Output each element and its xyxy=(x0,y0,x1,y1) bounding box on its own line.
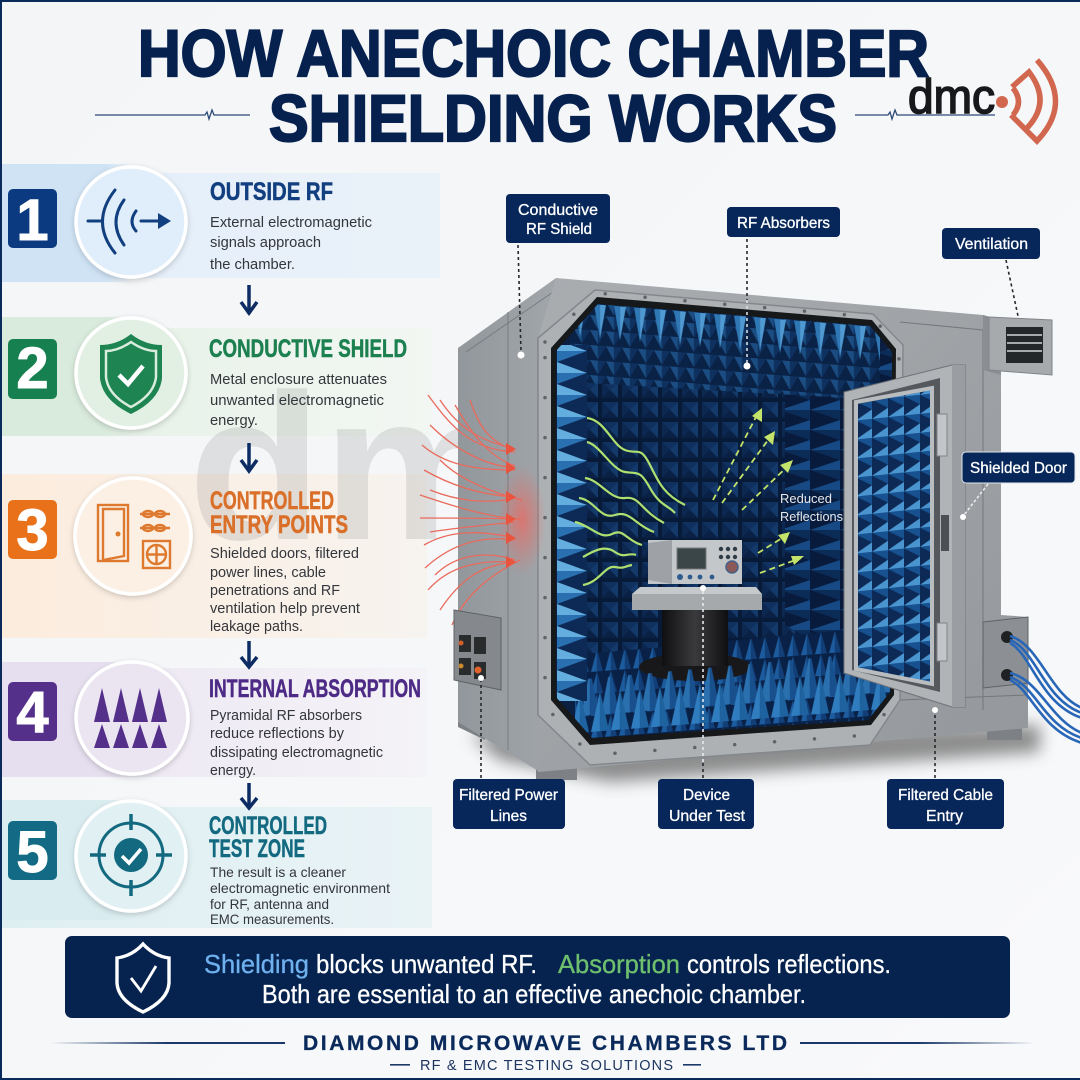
chamber interior with absorbers xyxy=(550,300,900,740)
reduced reflections label: Reduced xyxy=(780,492,832,506)
description: dissipating electromagnetic xyxy=(210,745,383,761)
summary banner xyxy=(65,936,1010,1018)
step 5: controlled test zone xyxy=(8,801,390,927)
step 3: controlled entry points xyxy=(8,478,360,635)
footer company name: DIAMOND MICROWAVE CHAMBERS LTD xyxy=(303,1032,787,1055)
front wall seams xyxy=(900,322,1028,710)
arrow 4 to 5 xyxy=(241,783,257,808)
side wall xyxy=(458,278,600,772)
frame xyxy=(538,290,903,765)
callout: filtered cable entry xyxy=(887,707,1004,829)
banner line 1: Shielding xyxy=(204,949,309,979)
icon: banner shield xyxy=(117,944,169,1012)
arrow 2 to 3 xyxy=(241,443,257,471)
description: reduce reflections by xyxy=(210,726,345,742)
number badge 1 xyxy=(8,188,57,253)
open shielded door xyxy=(844,365,965,707)
back wall pyramids xyxy=(585,375,795,660)
description: leakage paths. xyxy=(210,619,303,635)
number badge 4: 4 xyxy=(16,680,49,745)
right wall cones xyxy=(785,394,795,630)
description: power lines, cable xyxy=(210,565,326,581)
logo: dmc: dmc xyxy=(908,71,995,124)
callout: RF absorbers xyxy=(727,207,840,370)
turntable top xyxy=(632,587,762,610)
number badge 2: 2 xyxy=(16,336,49,401)
description: EMC measurements. xyxy=(210,911,334,927)
callout: filtered power lines: Filtered Power xyxy=(459,787,559,804)
reduced reflections label xyxy=(780,492,843,524)
callout: filtered power lines: Lines xyxy=(490,808,527,825)
callout: filtered cable entry: Entry xyxy=(926,808,963,825)
feet xyxy=(458,715,1022,780)
callout: filtered power lines xyxy=(453,675,565,829)
floor front row xyxy=(575,672,886,732)
title xyxy=(138,16,929,155)
description: Pyramidal RF absorbers xyxy=(210,708,362,724)
number badge 2 xyxy=(8,336,57,401)
ceiling dark cones xyxy=(570,300,880,400)
description: Shielded doors, filtered xyxy=(210,546,359,562)
banner line 2: Both are essential to an effective anechoic chamber. xyxy=(262,979,806,1009)
description: for RF, antenna and xyxy=(210,896,329,912)
description xyxy=(210,372,387,429)
description: External electromagnetic xyxy=(210,215,372,231)
number badge 3: 3 xyxy=(16,498,49,563)
inner frame xyxy=(551,297,896,745)
callout: filtered cable entry: Filtered Cable xyxy=(898,787,993,804)
callout: shielded door xyxy=(960,452,1075,520)
reflected dashed arrows xyxy=(713,408,804,573)
blue cables xyxy=(1010,636,1080,743)
callout: device under test: Device xyxy=(683,787,730,804)
callout: ventilation xyxy=(942,228,1040,316)
heading xyxy=(209,812,327,863)
description: signals approach xyxy=(210,235,321,251)
step 2: conductive shield xyxy=(8,318,407,429)
description xyxy=(210,864,390,927)
callout: conductive RF shield: RF Shield xyxy=(526,221,592,238)
external RF waves xyxy=(420,395,522,625)
footer rules xyxy=(50,1042,1035,1066)
footer tagline: RF & EMC TESTING SOLUTIONS xyxy=(420,1058,673,1074)
description: penetrations and RF xyxy=(210,583,340,599)
callout: conductive RF shield: Conductive xyxy=(518,202,598,219)
frame rivets xyxy=(545,293,899,755)
floor back rows xyxy=(580,630,890,738)
step 4: internal absorption xyxy=(8,662,421,779)
icon: absorber pyramids xyxy=(76,662,188,774)
reduced reflections label: Reflections xyxy=(780,510,843,524)
chamber illustration xyxy=(420,278,1080,782)
description: ventilation help prevent xyxy=(210,601,360,617)
device under test xyxy=(648,540,742,584)
heading: OUTSIDE RF xyxy=(210,178,333,206)
title divider right xyxy=(855,110,995,119)
number badge 5 xyxy=(8,820,57,885)
number badge 5: 5 xyxy=(16,820,49,885)
heading xyxy=(210,487,348,539)
cable entry box xyxy=(983,617,1028,688)
callout: RF absorbers: RF Absorbers xyxy=(737,215,830,232)
heading: INTERNAL ABSORPTION xyxy=(209,675,421,703)
step 1 band xyxy=(2,164,440,282)
step 3 band xyxy=(2,474,427,638)
callout: device under test: Under Test xyxy=(669,808,746,825)
description: electromagnetic environment xyxy=(210,880,390,896)
left wall cones xyxy=(557,345,587,701)
logo: dmc xyxy=(908,60,1056,141)
step 2 band xyxy=(2,317,432,436)
callout: shielded door: Shielded Door xyxy=(970,460,1068,477)
step 1: outside RF xyxy=(8,167,372,277)
description: The result is a cleaner xyxy=(210,864,346,880)
callout: device under test xyxy=(658,585,754,829)
description: energy. xyxy=(210,763,256,779)
banner line 1: Absorption xyxy=(558,949,680,979)
heading: CONTROLLED xyxy=(209,812,327,840)
icon: shield with check xyxy=(76,318,186,428)
heading: ENTRY POINTS xyxy=(210,511,348,539)
number badge 3 xyxy=(8,498,57,563)
step 5 band xyxy=(2,800,432,928)
number badge 1: 1 xyxy=(16,188,49,253)
heading: CONTROLLED xyxy=(210,487,334,515)
icon: RF waves with arrow xyxy=(76,167,186,277)
filtered power box xyxy=(454,610,501,690)
banner line 1 xyxy=(204,949,891,979)
step 4 band xyxy=(2,662,427,777)
side wall seams xyxy=(466,290,556,750)
description: energy. xyxy=(210,413,258,429)
red glow on wall xyxy=(498,465,546,575)
banner line 1: controls reflections. xyxy=(687,949,891,979)
ventilation unit xyxy=(983,315,1052,375)
title divider left xyxy=(95,110,250,119)
description xyxy=(210,708,383,779)
title: SHIELDING WORKS xyxy=(269,81,837,155)
icon: target with check xyxy=(76,801,186,911)
title: HOW ANECHOIC CHAMBER xyxy=(138,16,929,90)
description xyxy=(210,215,372,273)
arrow 1 to 2 xyxy=(241,285,257,314)
pedestal xyxy=(639,608,751,681)
heading: CONDUCTIVE SHIELD xyxy=(209,335,407,363)
number badge 4 xyxy=(8,680,57,745)
description: Metal enclosure attenuates xyxy=(210,372,387,388)
incoming RF waves inside chamber xyxy=(575,418,685,585)
floor middle row xyxy=(575,656,890,716)
heading: TEST ZONE xyxy=(209,835,305,863)
description: unwanted electromagnetic xyxy=(210,393,384,409)
watermark logo: dm xyxy=(188,352,518,584)
front wall xyxy=(538,278,1028,772)
callout: conductive RF shield xyxy=(506,194,610,358)
callout: ventilation: Ventilation xyxy=(955,236,1028,253)
ceiling light cones xyxy=(578,304,880,361)
icon: door, filters and fan xyxy=(75,478,191,594)
description xyxy=(210,546,360,635)
description: the chamber. xyxy=(210,257,295,273)
arrow 3 to 4 xyxy=(241,641,257,667)
banner line 1: blocks unwanted RF. xyxy=(316,949,537,979)
ground shadow xyxy=(470,725,1040,782)
